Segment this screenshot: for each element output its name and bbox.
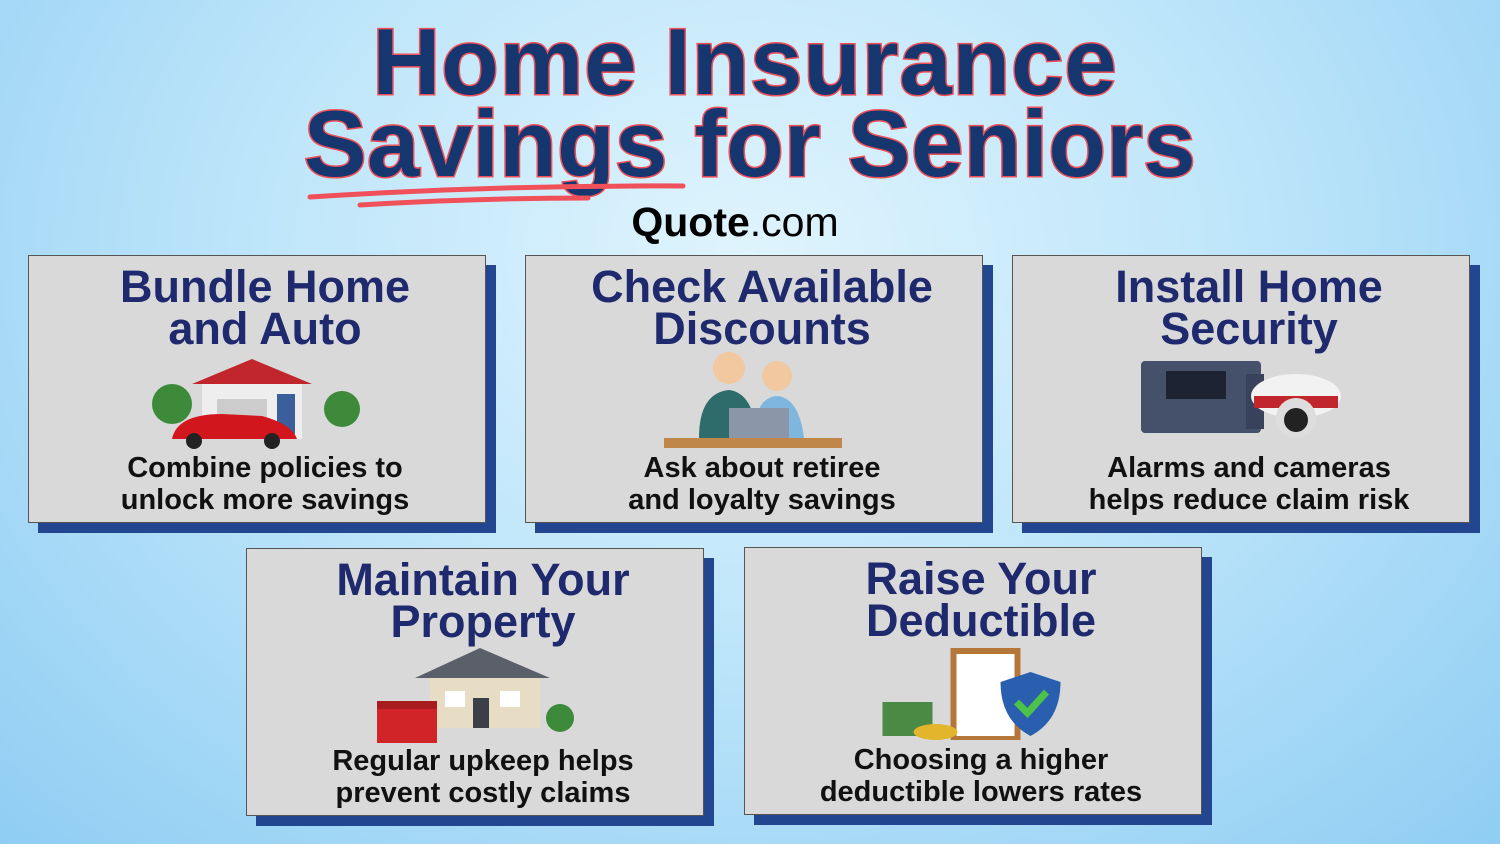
card: maintain: Property <box>390 596 576 647</box>
card: discounts: Check Available <box>591 261 933 312</box>
card: security <box>1012 255 1470 523</box>
card: deductible: Choosing a higher <box>854 744 1108 776</box>
card: maintain: Maintain Your <box>336 554 630 605</box>
card: maintain: Regular upkeep helps <box>332 745 634 777</box>
card: security: Security <box>1160 303 1338 354</box>
card: discounts <box>525 255 983 523</box>
title line 1: Home Insurance <box>372 9 1118 114</box>
title line 2: Savings for Seniors <box>304 91 1196 196</box>
card: maintain: prevent costly claims <box>336 777 630 809</box>
card: deductible: Raise Your <box>866 553 1096 604</box>
icon: seniors at laptop <box>664 352 842 448</box>
card: bundle: and Auto <box>168 303 362 354</box>
card: deductible: Deductible <box>866 595 1096 646</box>
card: bundle: unlock more savings <box>121 484 409 516</box>
card: security: Install Home <box>1115 261 1383 312</box>
icon: house and car <box>152 359 360 449</box>
card: bundle: Bundle Home <box>120 261 410 312</box>
card: discounts: Discounts <box>653 303 871 354</box>
card: security: helps reduce claim risk <box>1089 484 1409 516</box>
card: maintain <box>246 548 704 816</box>
underline <box>308 183 686 208</box>
icon: house and toolbox <box>377 648 574 743</box>
card: discounts: and loyalty savings <box>628 484 896 516</box>
logo: Quote.com <box>631 199 839 245</box>
icon: money, clipboard, shield <box>882 648 1060 740</box>
card: bundle: Combine policies to <box>127 452 403 484</box>
icon: alarm panel and camera <box>1141 361 1341 433</box>
card: security: Alarms and cameras <box>1107 452 1391 484</box>
card: deductible <box>744 547 1202 815</box>
card: deductible: deductible lowers rates <box>820 776 1142 808</box>
card: discounts: Ask about retiree <box>644 452 880 484</box>
card: bundle <box>28 255 486 523</box>
